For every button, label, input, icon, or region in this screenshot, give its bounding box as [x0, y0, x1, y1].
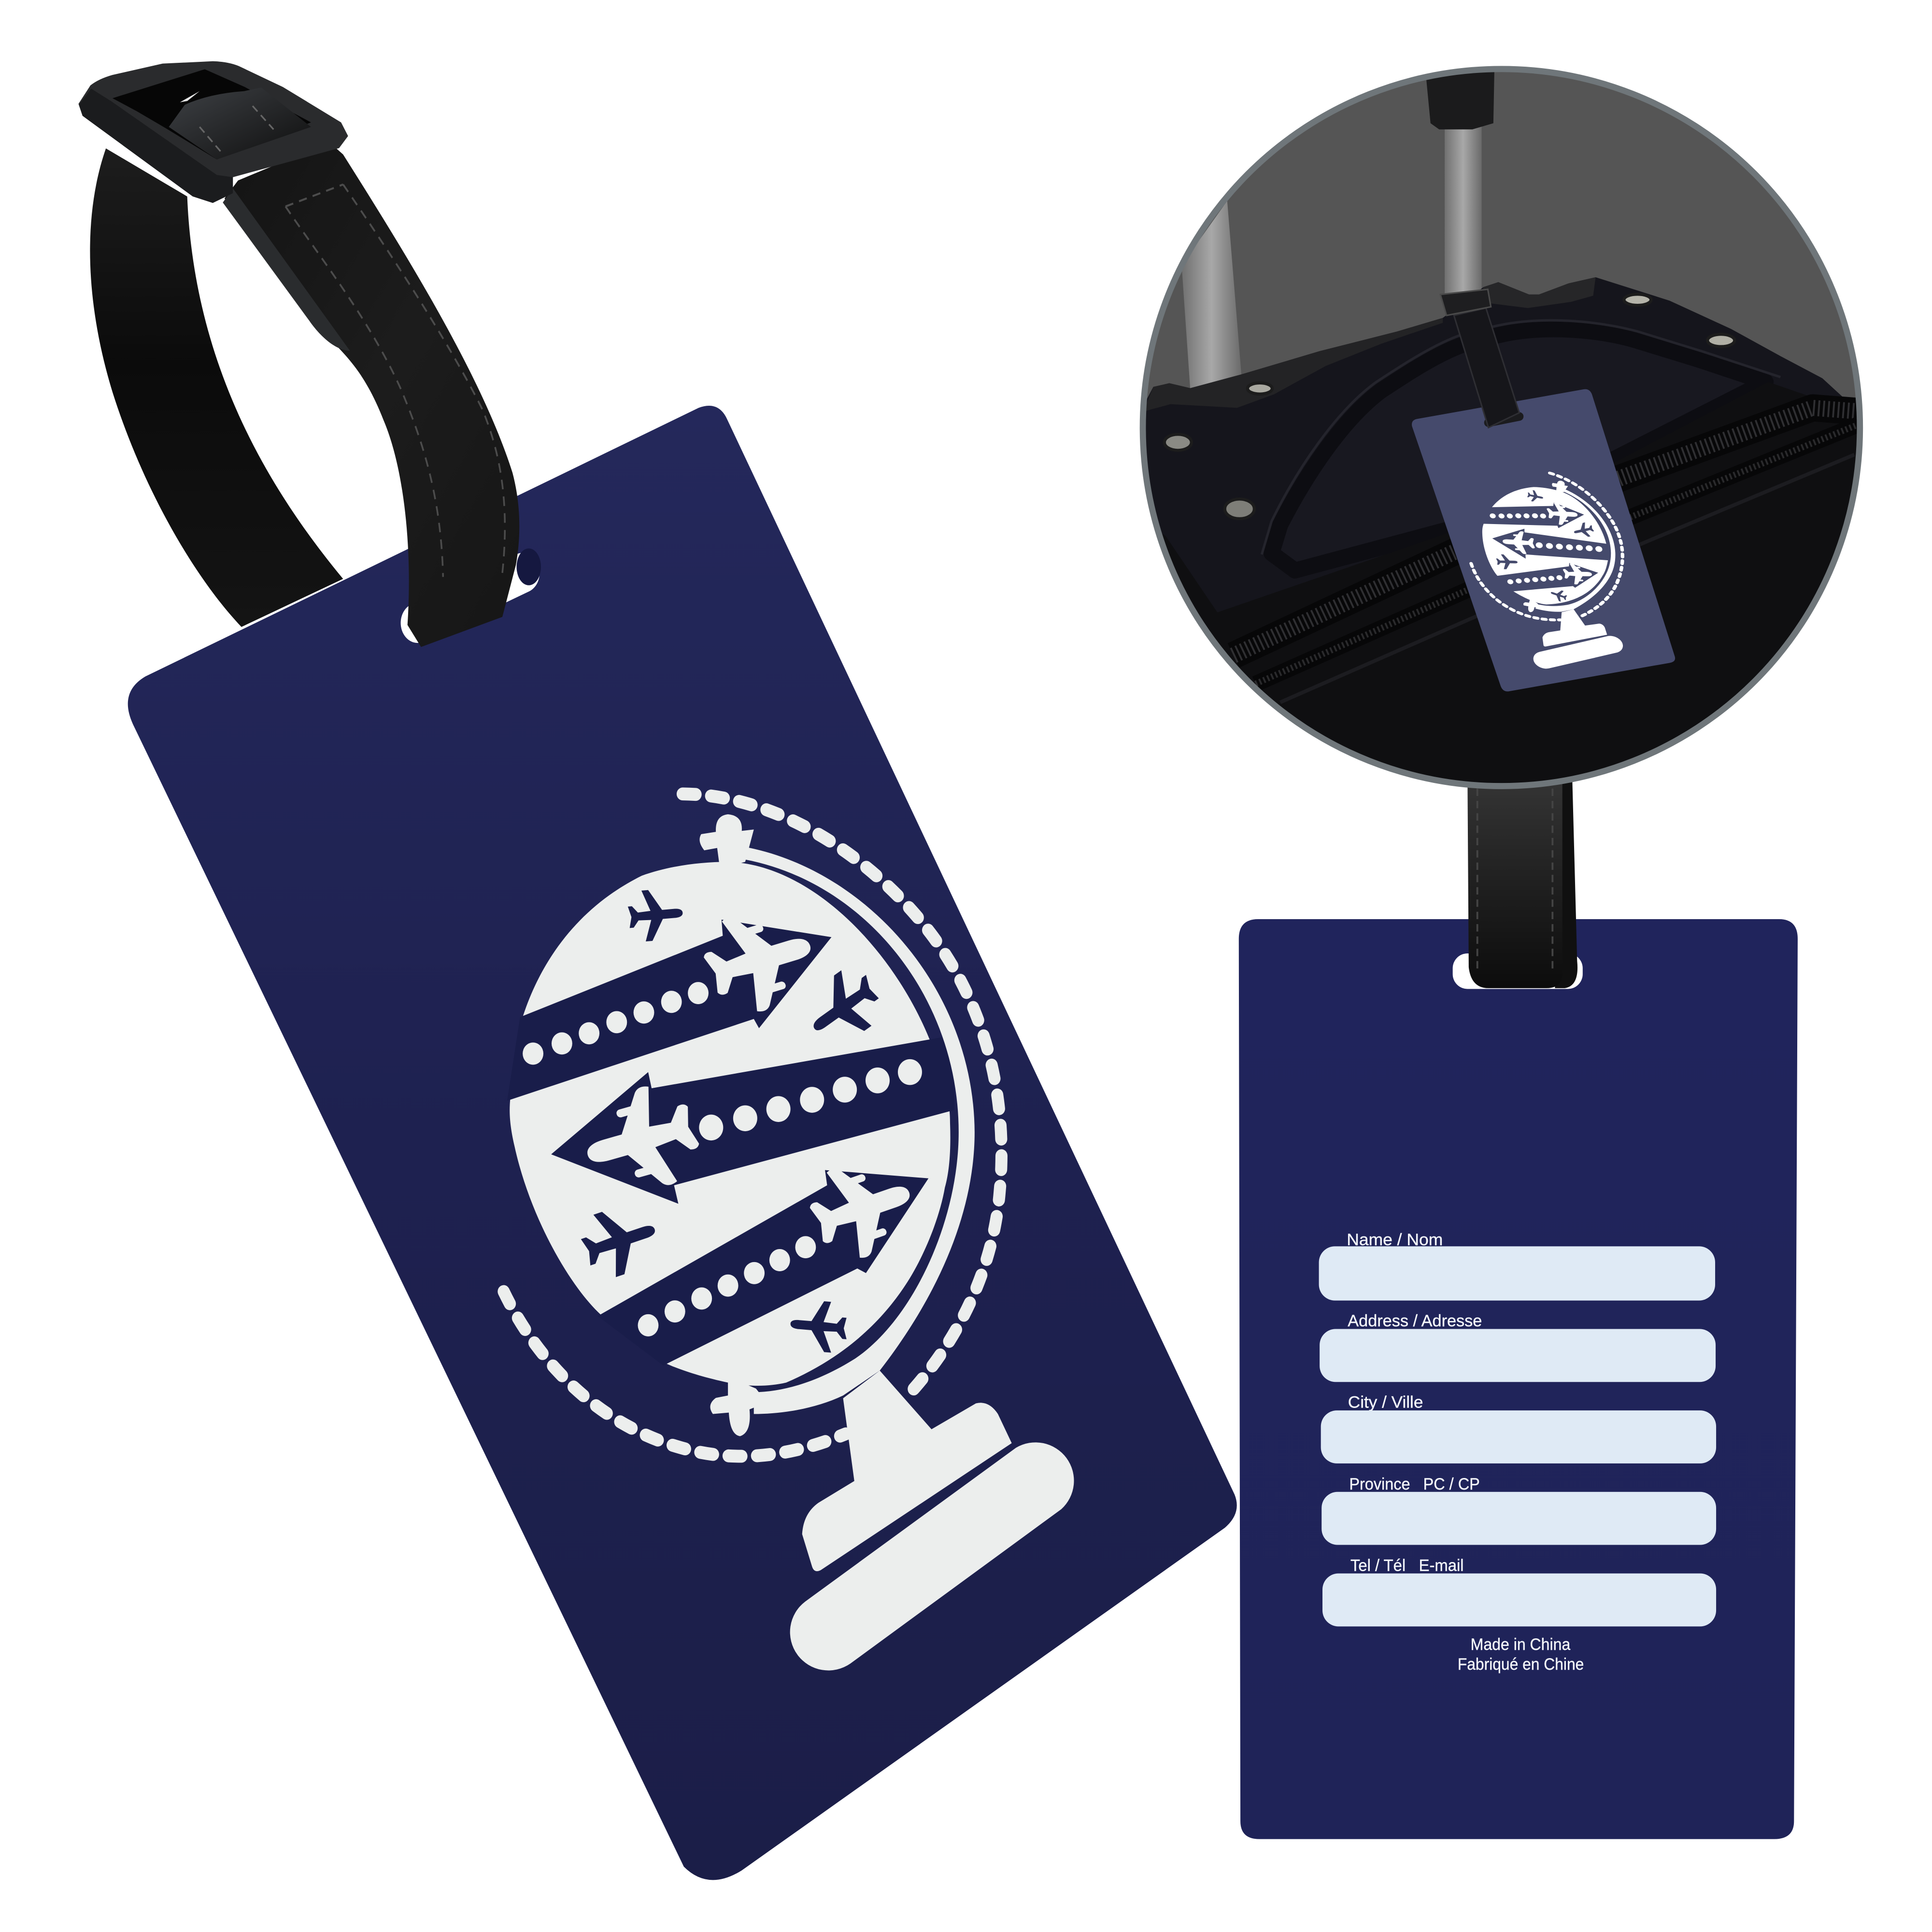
made in text: Made in China — [1471, 1635, 1571, 1654]
field: address — [1320, 1329, 1716, 1382]
made in text — [1458, 1635, 1584, 1674]
circle border — [1143, 69, 1860, 786]
small globe emblem — [1450, 459, 1661, 687]
rear strap loop of large tag — [90, 148, 343, 627]
telescoping handle center bar — [1445, 127, 1482, 293]
tail stitches — [199, 106, 273, 153]
field: province — [1321, 1492, 1716, 1545]
strap slot — [1453, 953, 1583, 989]
suitcase body — [1146, 277, 1842, 612]
label: Address / Adresse: Address / Adresse — [1348, 1312, 1482, 1330]
field: telephone and e-mail — [1322, 1574, 1716, 1626]
background sliver seen through the buckle — [180, 91, 199, 102]
small tag slot — [1489, 416, 1519, 423]
handle grip — [1426, 72, 1494, 129]
lower suitcase panel — [1140, 382, 1867, 801]
telescoping handle left bar — [1181, 201, 1241, 389]
strap — [1467, 776, 1577, 988]
main zipper — [1234, 408, 1861, 655]
wheel housing rim — [1143, 318, 1443, 412]
small tag buckle — [1440, 289, 1491, 315]
buckle front face shading — [79, 89, 233, 203]
second zipper — [1255, 425, 1857, 684]
panel: circular inset photo of tag on suitcase — [1140, 59, 1867, 801]
handle recess ridge highlight — [1262, 320, 1780, 554]
field: city — [1321, 1410, 1716, 1463]
rivets — [1165, 294, 1734, 519]
small tag strap — [1454, 308, 1519, 427]
strap — [225, 142, 519, 647]
fabric seam — [1280, 455, 1854, 702]
label: City / Ville: City / Ville — [1348, 1393, 1423, 1412]
circle background — [1140, 67, 1862, 789]
buckle window — [113, 69, 311, 159]
panel: back of tag — [1239, 776, 1798, 1839]
buckle frame — [78, 61, 348, 203]
label: Tel / Tél E-mail: Tel / Tél E-mail — [1350, 1557, 1464, 1575]
label: Name / Nom: Name / Nom — [1347, 1231, 1443, 1249]
tag body — [1239, 919, 1798, 1839]
small tag — [1412, 389, 1675, 692]
panel: large tag front — [128, 406, 1237, 1880]
label: Province PC / CP: Province PC / CP — [1349, 1475, 1480, 1493]
front strap of large tag — [223, 142, 519, 647]
field: name — [1319, 1246, 1715, 1301]
strap tail through buckle — [169, 87, 311, 159]
handle recess panel — [1272, 329, 1766, 570]
tag body — [128, 406, 1237, 1880]
buckle — [78, 61, 348, 203]
strap edge — [223, 188, 350, 351]
globe emblem with planes — [504, 794, 1074, 1670]
stitching — [285, 185, 505, 577]
strap slot — [418, 549, 541, 623]
made in text: Fabriqué en Chine — [1458, 1655, 1584, 1674]
top handle end — [1478, 277, 1596, 308]
